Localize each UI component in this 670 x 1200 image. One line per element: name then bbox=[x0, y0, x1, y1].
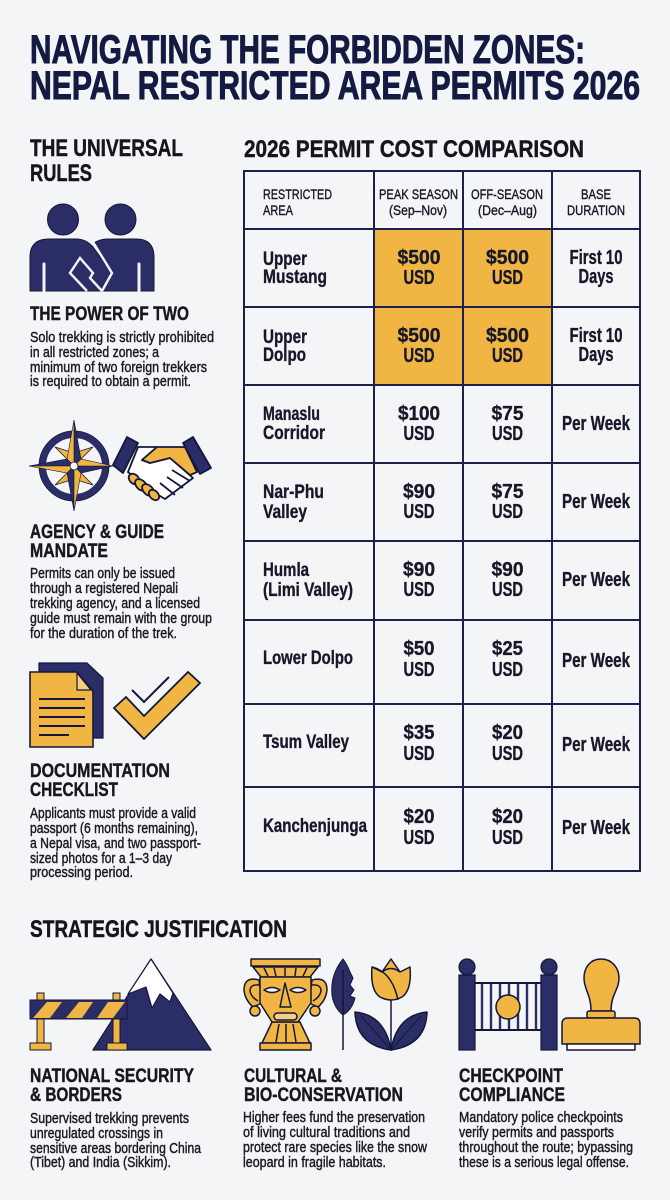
text block: documentation checklist: passport (6 months remaining), bbox=[30, 821, 198, 837]
text block: documentation checklist: processing period. bbox=[30, 865, 133, 881]
text block: documentation checklist: sized photos for a 1–3 day bbox=[30, 851, 173, 867]
row: nar-phu valley: USD bbox=[492, 501, 523, 523]
table header bbox=[263, 186, 625, 218]
icon: feather leaf bbox=[332, 959, 355, 1050]
text block: agency and guide mandate: AGENCY & GUIDE bbox=[30, 521, 164, 543]
table header: PEAK SEASON bbox=[379, 186, 458, 202]
text block: national security: sensitive areas bordering China bbox=[30, 1141, 202, 1157]
row: upper dolpo: Dolpo bbox=[263, 345, 306, 366]
icon: checkmark bbox=[114, 672, 200, 739]
row: lower dolpo: Lower Dolpo bbox=[263, 648, 353, 669]
text block: agency and guide mandate: MANDATE bbox=[30, 540, 108, 562]
row: nar-phu valley bbox=[263, 481, 631, 523]
text block: agency and guide mandate: through a registered Nepali bbox=[30, 581, 178, 597]
row: tsum valley: $20 bbox=[492, 722, 523, 744]
table header: AREA bbox=[263, 202, 294, 218]
text block: checkpoint compliance: verify permits and passports bbox=[459, 1125, 614, 1141]
row: upper mustang: Days bbox=[578, 266, 614, 288]
row: humla bbox=[263, 559, 631, 601]
text block: the power of two bbox=[30, 303, 214, 390]
row: humla: (Limi Valley) bbox=[263, 580, 353, 601]
row: nar-phu valley: Per Week bbox=[562, 491, 631, 513]
table: permit costs bbox=[244, 171, 640, 871]
text block: documentation checklist: CHECKLIST bbox=[30, 779, 118, 801]
text block: national security: (Tibet) and India (Sikkim). bbox=[30, 1155, 171, 1171]
icon: rubber stamp bbox=[562, 959, 640, 1050]
text block: the power of two: in all restricted zones; a bbox=[30, 345, 160, 361]
row: upper mustang bbox=[263, 247, 622, 289]
row: humla: Humla bbox=[263, 560, 309, 581]
text block: the power of two: is required to obtain a permit. bbox=[30, 374, 191, 390]
table header: BASE bbox=[581, 186, 611, 202]
row: upper dolpo bbox=[263, 325, 622, 367]
row: manaslu corridor: $75 bbox=[492, 403, 524, 425]
row: lower dolpo: USD bbox=[404, 659, 434, 681]
heading: the universal rules: THE UNIVERSAL bbox=[30, 135, 183, 162]
row: kanchenjunga: $20 bbox=[492, 806, 523, 828]
row: lower dolpo: USD bbox=[492, 659, 523, 681]
icon: two people linked bbox=[30, 204, 154, 291]
text block: agency and guide mandate: for the duration of the trek. bbox=[30, 626, 177, 642]
icon: checkpoint gate bbox=[459, 959, 557, 1050]
row: lower dolpo: $50 bbox=[404, 638, 434, 660]
row: lower dolpo bbox=[263, 638, 631, 681]
row: upper dolpo: Upper bbox=[263, 327, 307, 348]
icon: handshake bbox=[113, 437, 211, 502]
icon: tulip bbox=[355, 959, 427, 1050]
text block: the power of two: Solo trekking is strictly prohibited bbox=[30, 330, 214, 346]
heading: the universal rules bbox=[30, 135, 183, 187]
row: upper mustang: $500 bbox=[486, 247, 529, 269]
row: humla: Per Week bbox=[562, 569, 631, 591]
table header: DURATION bbox=[567, 202, 625, 218]
row: nar-phu valley: Valley bbox=[263, 502, 307, 523]
row: upper dolpo: $500 bbox=[486, 325, 529, 347]
row: upper mustang: Upper bbox=[263, 249, 307, 270]
text block: cultural and bio-conservation: BIO-CONSERVATION bbox=[244, 1084, 403, 1106]
text block: cultural and bio-conservation: Higher fees fund the preservation bbox=[243, 1110, 425, 1126]
row: upper mustang: $500 bbox=[398, 247, 440, 269]
row: tsum valley: Per Week bbox=[562, 734, 631, 756]
row: tsum valley: Tsum Valley bbox=[263, 732, 349, 753]
row: kanchenjunga: $20 bbox=[404, 806, 434, 828]
row: kanchenjunga: Per Week bbox=[562, 817, 631, 839]
text block: the power of two: THE POWER OF TWO bbox=[30, 303, 189, 325]
row: kanchenjunga: Kanchenjunga bbox=[263, 816, 367, 837]
text block: agency and guide mandate bbox=[30, 521, 212, 642]
text block: cultural and bio-conservation: protect rare species like the snow bbox=[243, 1140, 427, 1156]
text block: national security: NATIONAL SECURITY bbox=[30, 1065, 194, 1087]
text block: checkpoint compliance: Mandatory police checkpoints bbox=[459, 1110, 623, 1126]
text block: national security: & BORDERS bbox=[30, 1084, 122, 1106]
text block: agency and guide mandate: guide must remain with the group bbox=[30, 611, 212, 627]
row: manaslu corridor: USD bbox=[492, 423, 523, 445]
text block: documentation checklist: DOCUMENTATION bbox=[30, 760, 170, 782]
row: manaslu corridor: $100 bbox=[398, 403, 440, 425]
text block: national security bbox=[30, 1065, 202, 1171]
row: upper mustang: Mustang bbox=[263, 267, 327, 288]
text block: agency and guide mandate: trekking agency, and a licensed bbox=[30, 596, 200, 612]
row: upper mustang: First 10 bbox=[570, 247, 622, 269]
text block: cultural and bio-conservation: leopard in fragile habitats. bbox=[243, 1155, 386, 1171]
icon: compass bbox=[29, 420, 113, 511]
text block: national security: Supervised trekking prevents bbox=[30, 1111, 189, 1127]
title bbox=[30, 28, 640, 108]
row: manaslu corridor bbox=[263, 403, 631, 445]
row: tsum valley bbox=[263, 722, 631, 765]
row: nar-phu valley: $75 bbox=[492, 481, 524, 503]
row: manaslu corridor: Per Week bbox=[562, 413, 631, 435]
text block: cultural and bio-conservation: of living cultural traditions and bbox=[243, 1125, 410, 1141]
row: humla: $90 bbox=[492, 559, 524, 581]
text block: cultural and bio-conservation bbox=[243, 1065, 427, 1171]
row: kanchenjunga bbox=[263, 806, 631, 849]
row: humla: $90 bbox=[403, 559, 435, 581]
row: nar-phu valley: $90 bbox=[403, 481, 435, 503]
text block: checkpoint compliance: these is a serious legal offense. bbox=[459, 1155, 629, 1171]
text block: documentation checklist bbox=[30, 760, 201, 881]
row: tsum valley: USD bbox=[404, 743, 434, 765]
row: upper dolpo: $500 bbox=[398, 325, 440, 347]
highlighted cells bbox=[374, 229, 552, 385]
row: lower dolpo: Per Week bbox=[562, 650, 631, 672]
row: tsum valley: $35 bbox=[404, 722, 434, 744]
heading: the universal rules: RULES bbox=[30, 160, 92, 187]
row: nar-phu valley: USD bbox=[404, 501, 434, 523]
row: nar-phu valley: Nar-Phu bbox=[263, 482, 324, 503]
text block: documentation checklist: Applicants must provide a valid bbox=[30, 806, 196, 822]
text block: checkpoint compliance: CHECKPOINT bbox=[459, 1065, 563, 1087]
icon: road barrier bbox=[30, 993, 127, 1050]
table header: (Dec–Aug) bbox=[478, 202, 537, 218]
row: manaslu corridor: USD bbox=[404, 423, 434, 445]
text block: documentation checklist: a Nepal visa, and two passport- bbox=[30, 836, 201, 852]
icon: mountain bbox=[93, 959, 211, 1050]
heading: strategic justification: STRATEGIC JUSTIFICATION bbox=[30, 916, 287, 943]
row: upper mustang: USD bbox=[404, 267, 434, 289]
row: upper dolpo: Days bbox=[578, 344, 614, 366]
row: manaslu corridor: Manaslu bbox=[263, 404, 320, 425]
row: tsum valley: USD bbox=[492, 743, 523, 765]
text block: agency and guide mandate: Permits can only be issued bbox=[30, 566, 175, 582]
table header: (Sep–Nov) bbox=[389, 202, 447, 218]
text block: national security: unregulated crossings in bbox=[30, 1126, 163, 1142]
heading: permit cost comparison: 2026 PERMIT COST COMPARISON bbox=[244, 136, 584, 163]
row: humla: USD bbox=[492, 579, 523, 601]
table header: RESTRICTED bbox=[263, 186, 332, 202]
text block: checkpoint compliance bbox=[459, 1065, 633, 1171]
icon: documents bbox=[30, 663, 103, 747]
text block: checkpoint compliance: throughout the route; bypassing bbox=[459, 1140, 633, 1156]
text block: checkpoint compliance: COMPLIANCE bbox=[459, 1084, 565, 1106]
text block: the power of two: minimum of two foreign trekkers bbox=[30, 360, 207, 376]
row: upper dolpo: USD bbox=[492, 345, 523, 367]
row: upper mustang: USD bbox=[492, 267, 523, 289]
row: kanchenjunga: USD bbox=[404, 827, 434, 849]
row: humla: USD bbox=[404, 579, 434, 601]
row: manaslu corridor: Corridor bbox=[263, 423, 325, 444]
row: lower dolpo: $25 bbox=[492, 638, 523, 660]
text block: cultural and bio-conservation: CULTURAL & bbox=[244, 1065, 342, 1087]
row: upper dolpo: USD bbox=[404, 345, 434, 367]
icon: cultural mask bbox=[244, 959, 327, 1050]
table header: OFF-SEASON bbox=[471, 186, 543, 202]
row: upper dolpo: First 10 bbox=[570, 325, 622, 347]
row: kanchenjunga: USD bbox=[492, 827, 523, 849]
